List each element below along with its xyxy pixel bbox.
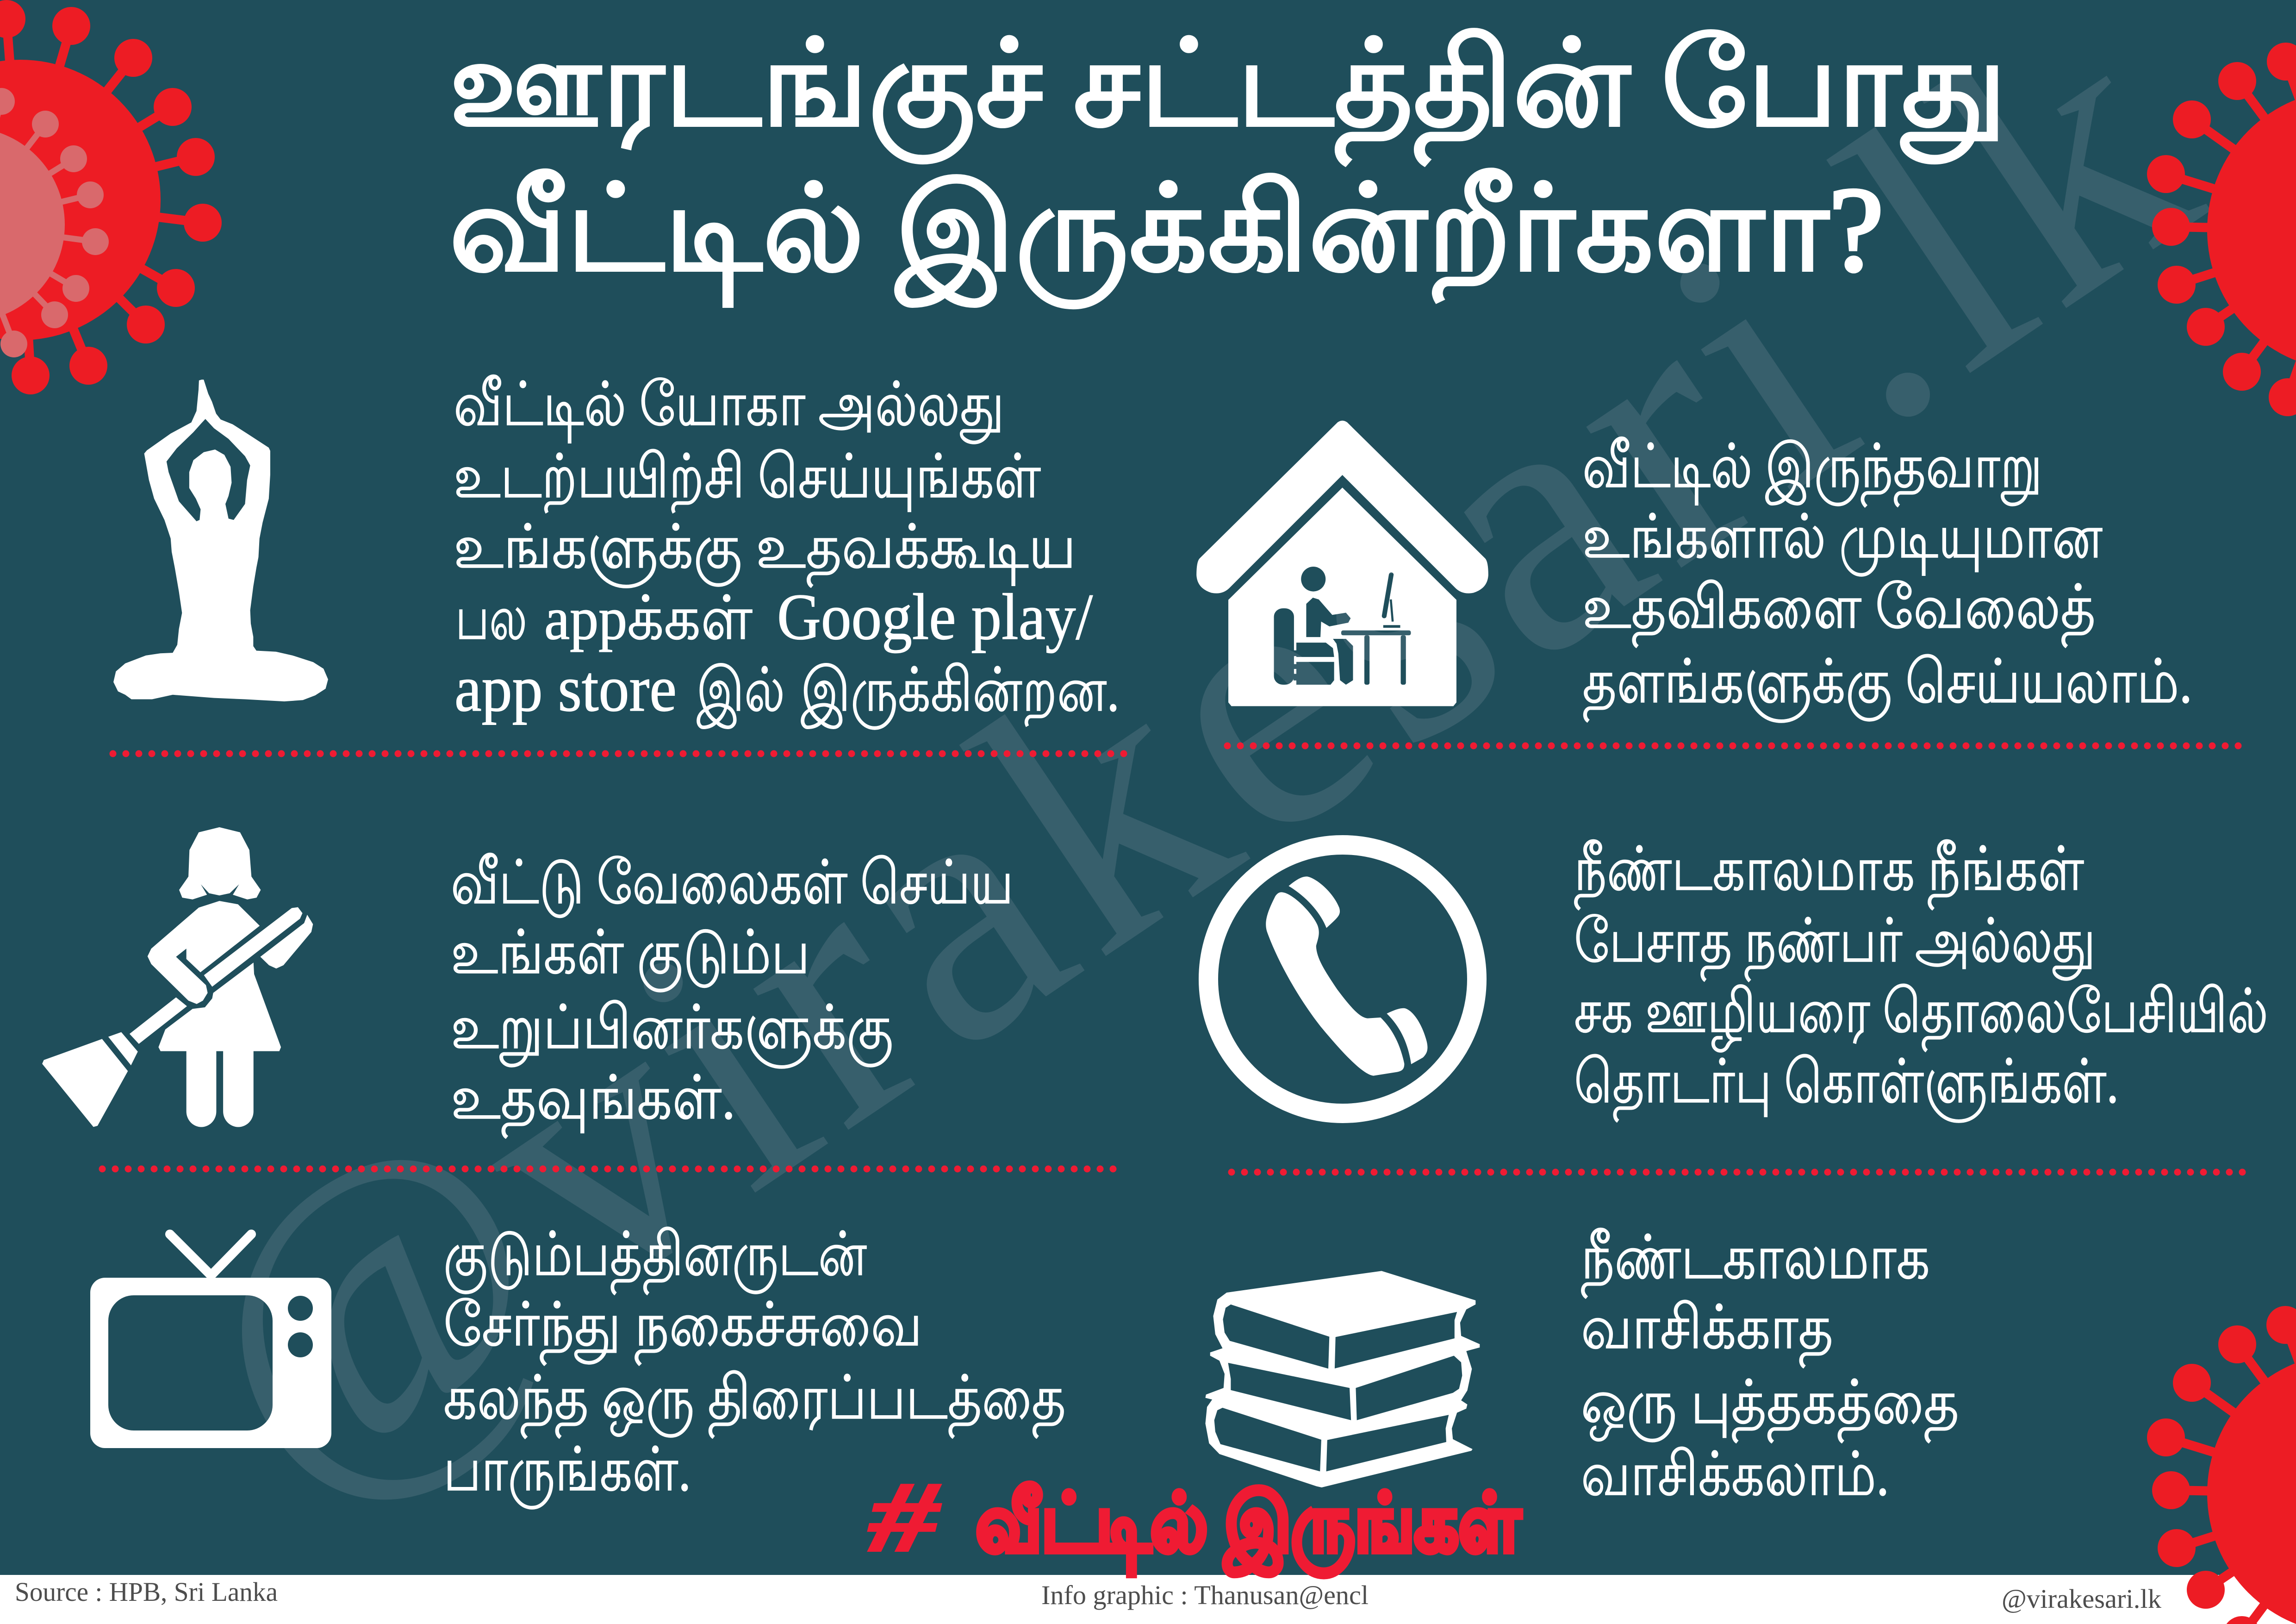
- title: [449, 18, 2007, 307]
- text: read a book: ஒரு புத்தகத்தை: [1581, 1369, 1959, 1443]
- text: yoga: இருக்கின்றன.: [801, 657, 1120, 730]
- text: yoga: appக்கள்: [544, 585, 753, 652]
- divider: row 2 right: [1232, 1168, 2248, 1176]
- footer handle: @virakesari.lk: [2002, 1584, 2161, 1614]
- text: yoga: உங்களுக்கு உதவக்கூடிய: [454, 514, 1076, 588]
- footer band: [0, 1575, 2296, 1624]
- text: read a book: [1581, 1224, 1959, 1508]
- text: yoga: வீட்டில் யோகா அல்லது: [454, 371, 1004, 444]
- divider: row 1 left: [113, 750, 1125, 757]
- text: housework: [451, 849, 1014, 1138]
- text: housework: உறுப்பினர்களுக்கு: [451, 994, 893, 1068]
- text: working from home: [1582, 433, 2192, 723]
- virus: top left: [0, 0, 222, 394]
- text: housework: உதவுங்கள்.: [451, 1065, 735, 1138]
- icon: television: [90, 1234, 331, 1448]
- text: yoga: Google play/: [777, 580, 1093, 653]
- icon: telephone: [1208, 845, 1477, 1113]
- text: housework: உங்கள் குடும்ப: [451, 919, 810, 992]
- hashtag slogan: #: [869, 1462, 940, 1572]
- hashtag slogan: வீட்டில் இருங்கள்: [976, 1480, 1521, 1577]
- title: வீட்டில் இருக்கின்றீர்களா?: [449, 163, 1884, 307]
- text: working from home: வீட்டில் இருந்தவாறு: [1582, 433, 2042, 507]
- text: working from home: தளங்களுக்கு செய்யலாம்.: [1582, 649, 2192, 723]
- icon: working from home: [1196, 421, 1488, 706]
- text: working from home: உங்களால் முடியுமான: [1582, 504, 2103, 576]
- divider: row 1 right: [1227, 743, 2243, 749]
- text: read a book: நீண்டகாலமாக: [1581, 1224, 1930, 1299]
- text: phone a friend: தொடர்பு கொள்ளுங்கள்.: [1574, 1049, 2119, 1123]
- virus: bottom right: [2147, 1306, 2296, 1624]
- icon: books: [1205, 1271, 1480, 1487]
- hashtag slogan: [869, 1462, 1521, 1577]
- text: watch a film: சேர்ந்து நகைச்சுவை: [443, 1292, 922, 1366]
- footer credit: Info graphic : Thanusan@encl: [1041, 1580, 1369, 1610]
- text: watch a film: [443, 1221, 1066, 1509]
- text: phone a friend: பேசாத நண்பர் அல்லது: [1574, 908, 2096, 982]
- footer source: Source : HPB, Sri Lanka: [15, 1577, 278, 1607]
- text: watch a film: பாருங்கள்.: [443, 1437, 691, 1509]
- text: working from home: உதவிகளை வேலைத்: [1582, 574, 2096, 648]
- text: yoga: உடற்பயிற்சி செய்யுங்கள்: [454, 443, 1041, 513]
- text: yoga: பல: [455, 585, 527, 652]
- text: phone a friend: [1574, 836, 2268, 1123]
- icon: woman sweeping: [42, 827, 313, 1127]
- text: phone a friend: நீண்டகாலமாக நீங்கள்: [1574, 836, 2084, 910]
- text: watch a film: குடும்பத்தினருடன்: [443, 1221, 867, 1295]
- text: watch a film: கலந்த ஒரு திரைப்படத்தை: [443, 1365, 1066, 1439]
- text: yoga: app store: [454, 652, 677, 725]
- title: ஊரடங்குச் சட்டத்தின் போது: [449, 18, 2007, 166]
- icon: yoga: [113, 380, 328, 701]
- virus: top right: [2147, 43, 2296, 416]
- text: housework: வீட்டு வேலைகள் செய்ய: [451, 849, 1014, 918]
- text: read a book: வாசிக்கலாம்.: [1581, 1441, 1889, 1508]
- text: yoga: இல்: [697, 657, 785, 729]
- text: read a book: வாசிக்காத: [1581, 1294, 1833, 1368]
- text: yoga: [454, 371, 1120, 730]
- divider: row 2 left: [102, 1166, 1116, 1172]
